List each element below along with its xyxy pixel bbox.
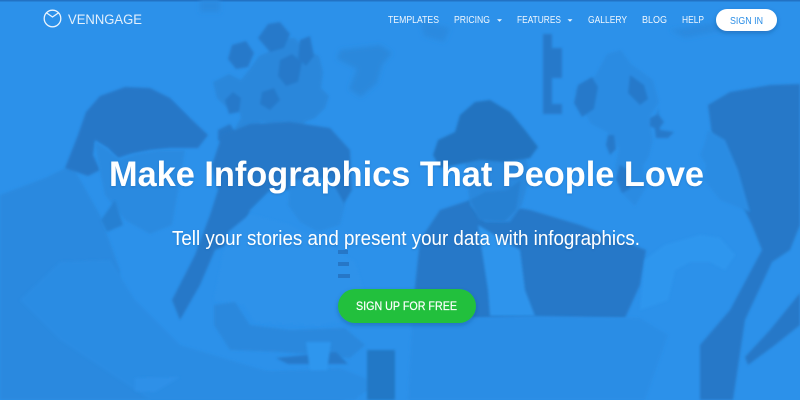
table items (135, 342, 395, 400)
man left: hair (65, 87, 208, 176)
plant centre-right (543, 34, 674, 206)
man with hat: face (465, 155, 530, 222)
navigation: HELP (682, 14, 704, 26)
woman right: hand (640, 235, 735, 310)
wordmark: VENNGAGE (68, 12, 142, 27)
navigation: TEMPLATES (388, 14, 439, 26)
title: Make Infographics That People Love (109, 155, 704, 194)
wall detail (200, 0, 725, 97)
navigation: FEATURES (517, 14, 561, 26)
man left: face (95, 142, 185, 234)
laptop (408, 316, 668, 400)
man left: arm (20, 260, 375, 400)
logo (44, 10, 142, 27)
plant left (213, 22, 329, 146)
navigation: BLOG (642, 14, 667, 26)
navigation: PRICING (454, 14, 490, 26)
man with hat: jacket (413, 200, 646, 318)
man with hat: hat (433, 100, 538, 168)
sign in button: SIGN IN (730, 15, 763, 27)
woman centre: hair (172, 122, 352, 320)
woman centre: face (288, 178, 345, 232)
woman right: face (700, 130, 750, 212)
icon: venngage clock logo (44, 10, 61, 27)
sign in button (716, 9, 777, 31)
man left: shirt (0, 165, 375, 400)
sign up button (338, 289, 476, 323)
subtitle: Tell your stories and present your data with infographics. (172, 228, 640, 250)
man with hat: shirt (478, 225, 535, 316)
navigation: GALLERY (588, 14, 627, 26)
sign up button: SIGN UP FOR FREE (356, 299, 457, 313)
woman centre: top (214, 214, 372, 325)
woman right: hair (700, 84, 800, 400)
navigation (388, 14, 704, 26)
woman centre: arm (214, 302, 365, 358)
